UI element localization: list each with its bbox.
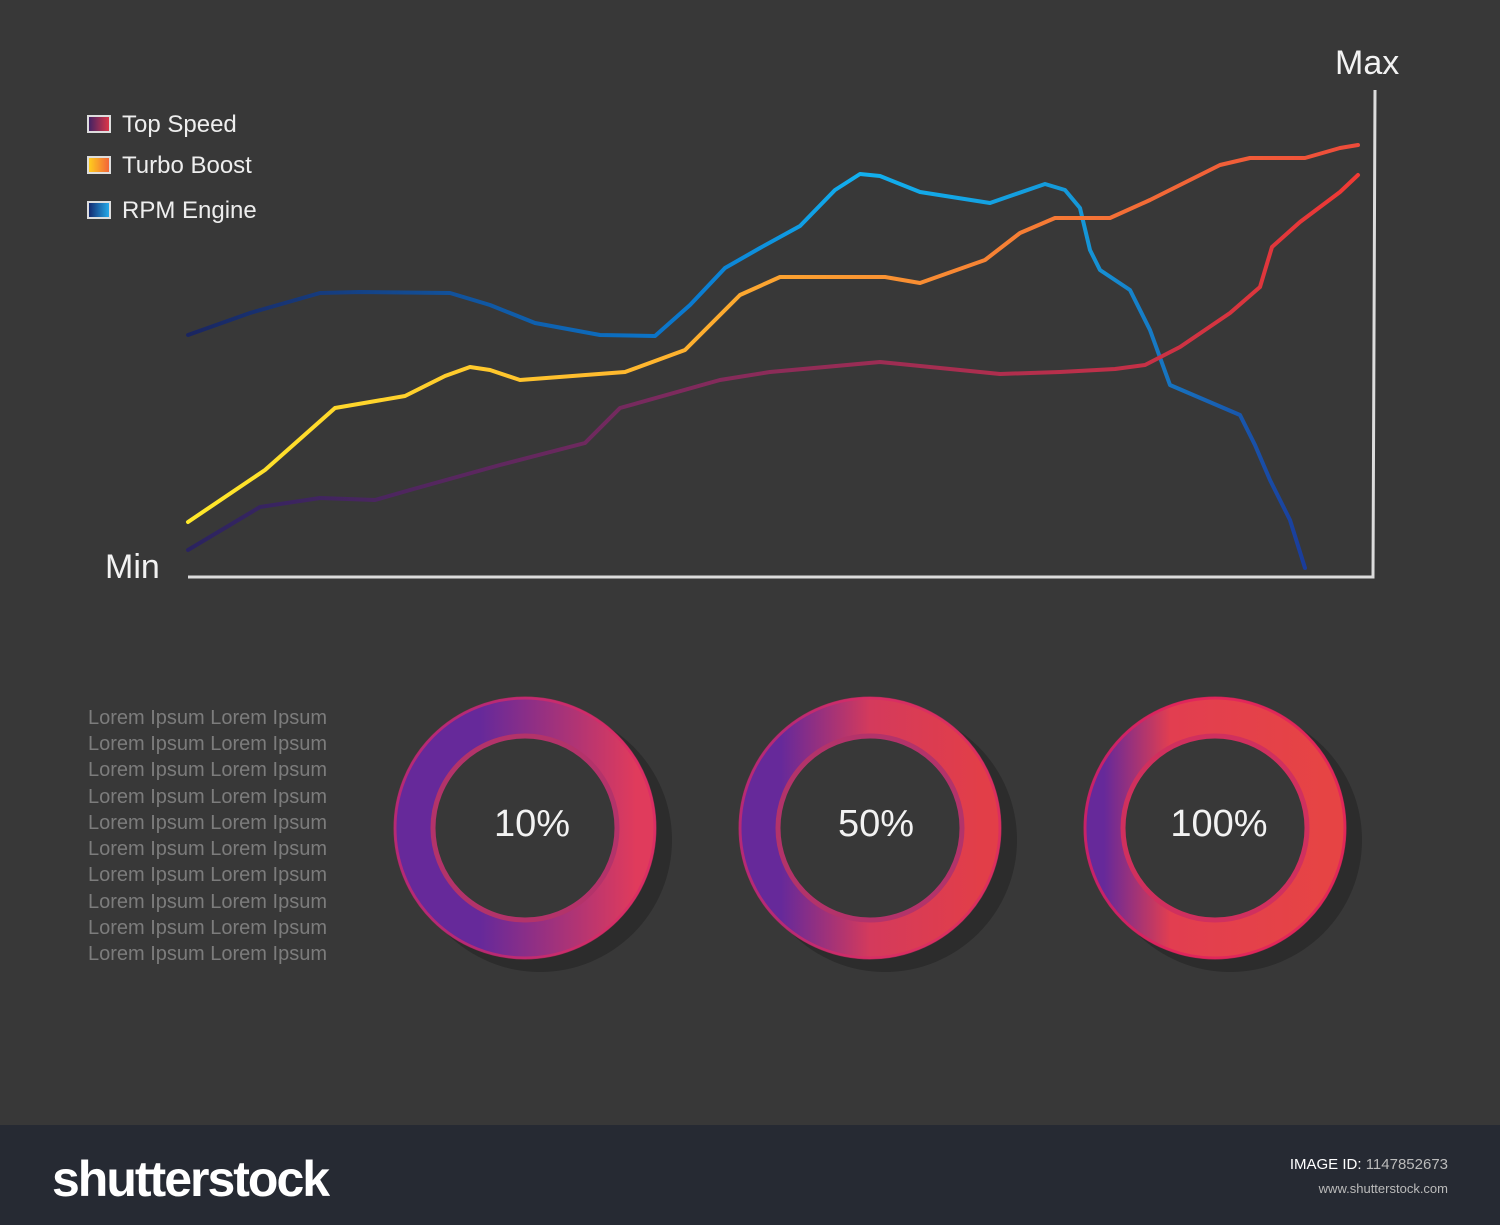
footer bar: www.shutterstock.com (1318, 1181, 1448, 1196)
text block: lorem: Lorem Ipsum Lorem Ipsum (88, 759, 327, 781)
legend: Turbo Boost (122, 152, 252, 179)
footer bar (0, 1125, 1500, 1225)
footer bar: shutterstock (52, 1151, 330, 1207)
line chart (188, 145, 1358, 568)
text block: lorem: Lorem Ipsum Lorem Ipsum (88, 943, 327, 965)
donut: 100%: 100% (1170, 803, 1268, 845)
donut: 100% (1085, 698, 1362, 972)
donut: 50% (740, 698, 1017, 972)
donut: 50%: 50% (838, 803, 914, 845)
text block: lorem: Lorem Ipsum Lorem Ipsum (88, 733, 327, 755)
donut: 10% (395, 698, 672, 972)
text block: lorem (88, 707, 327, 965)
text block: lorem: Lorem Ipsum Lorem Ipsum (88, 786, 327, 808)
legend (88, 111, 257, 224)
axis label: Min: Min (105, 548, 160, 586)
text block: lorem: Lorem Ipsum Lorem Ipsum (88, 864, 327, 886)
footer bar: IMAGE ID: 1147852673 (1290, 1156, 1448, 1173)
donut: 10%: 10% (494, 803, 570, 845)
text block: lorem: Lorem Ipsum Lorem Ipsum (88, 891, 327, 913)
text block: lorem: Lorem Ipsum Lorem Ipsum (88, 812, 327, 834)
legend: Top Speed (122, 111, 237, 138)
legend: RPM Engine (122, 197, 257, 224)
text block: lorem: Lorem Ipsum Lorem Ipsum (88, 838, 327, 860)
axes (188, 90, 1375, 577)
axis label: Max: Max (1335, 44, 1399, 82)
text block: lorem: Lorem Ipsum Lorem Ipsum (88, 917, 327, 939)
text block: lorem: Lorem Ipsum Lorem Ipsum (88, 707, 327, 729)
